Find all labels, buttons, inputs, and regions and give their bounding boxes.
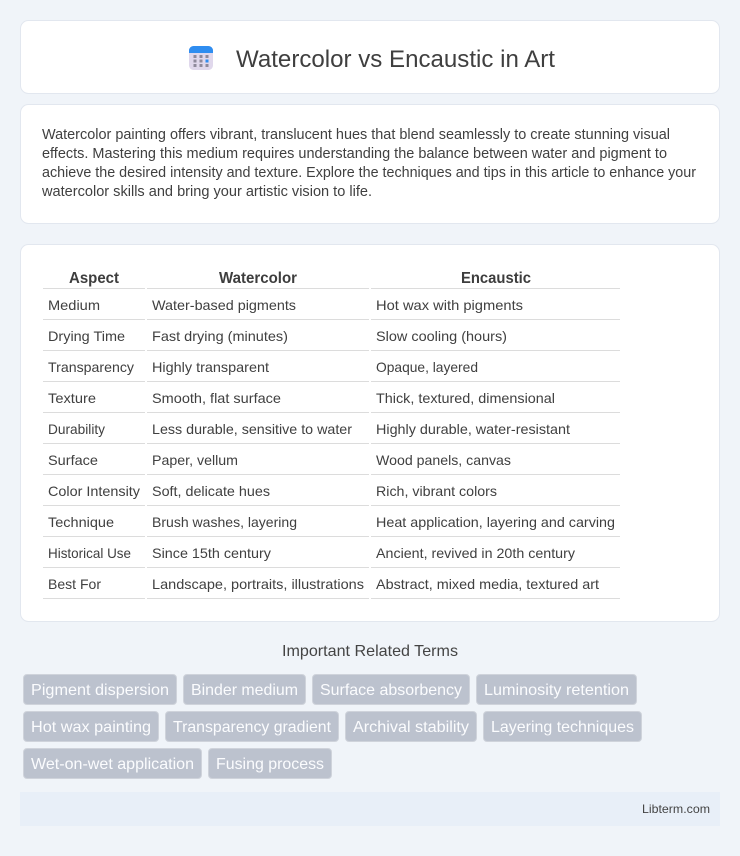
tag: Pigment dispersion: Pigment dispersion xyxy=(31,682,169,699)
row: Historical Use xyxy=(48,545,575,561)
related term tags xyxy=(24,674,642,778)
table header: Aspect xyxy=(69,270,120,287)
row: Color Intensity: Soft, delicate hues xyxy=(152,483,270,499)
intro text: achieve the desired intensity and texture. Explore the techniques and tips in this article to enhance your xyxy=(42,165,696,181)
row: Texture: Smooth, flat surface xyxy=(152,390,281,406)
row: Best For: Landscape, portraits, illustrations xyxy=(152,576,364,592)
row: Technique: Heat application, layering and carving xyxy=(376,514,615,530)
footer credit: Libterm.com xyxy=(642,802,710,816)
row: Drying Time: Fast drying (minutes) xyxy=(152,328,288,344)
tag: Surface absorbency xyxy=(312,674,470,704)
title: Watercolor vs Encaustic in Art xyxy=(236,46,555,73)
tag: Wet-on-wet application xyxy=(24,748,202,778)
row: Surface: Surface xyxy=(48,452,98,468)
table header: Watercolor xyxy=(219,270,297,287)
row: Texture xyxy=(48,390,555,406)
icon: calendar palette xyxy=(189,46,213,70)
tag: Luminosity retention: Luminosity retention xyxy=(484,682,629,699)
table header: Encaustic xyxy=(461,270,531,287)
row: Transparency: Highly transparent xyxy=(152,359,269,375)
tag: Transparency gradient: Transparency gradient xyxy=(173,719,332,736)
table header xyxy=(69,270,531,287)
row: Durability: Highly durable, water-resistant xyxy=(376,421,570,437)
tag: Pigment dispersion xyxy=(24,674,176,704)
tag: Layering techniques xyxy=(484,712,642,742)
row: Medium: Hot wax with pigments xyxy=(376,297,523,313)
tag: Luminosity retention xyxy=(476,674,636,704)
tag: Binder medium xyxy=(184,674,306,704)
tag: Layering techniques: Layering techniques xyxy=(491,719,634,736)
row: Best For: Abstract, mixed media, textured art xyxy=(376,576,599,592)
intro text: effects. Mastering this medium requires understanding the balance between water and pigment to xyxy=(42,146,667,162)
row: Historical Use: Historical Use xyxy=(48,545,131,561)
tag: Transparency gradient xyxy=(166,712,338,742)
row: Historical Use: Ancient, revived in 20th century xyxy=(376,545,575,561)
row: Best For xyxy=(48,576,599,592)
row: Durability xyxy=(48,421,570,437)
row: Medium: Water-based pigments xyxy=(152,297,296,313)
row: Transparency: Transparency xyxy=(48,359,134,375)
related terms heading: Important Related Terms xyxy=(282,643,458,660)
row: Technique: Brush washes, layering xyxy=(152,514,297,530)
row: Surface xyxy=(48,452,511,468)
panel: comparison table xyxy=(20,244,720,622)
row: Best For: Best For xyxy=(48,576,101,592)
row: Texture: Texture xyxy=(48,390,96,406)
row: Transparency: Opaque, layered xyxy=(376,359,478,375)
row: Technique xyxy=(48,514,615,530)
intro text: watercolor skills and bring your artistic vision to life. xyxy=(41,184,372,200)
tag: Wet-on-wet application: Wet-on-wet application xyxy=(31,756,194,773)
row: Color Intensity: Color Intensity xyxy=(48,483,140,499)
row: Surface: Wood panels, canvas xyxy=(376,452,511,468)
tag: Surface absorbency: Surface absorbency xyxy=(320,682,462,699)
intro text: Watercolor painting offers vibrant, translucent hues that blend seamlessly to create stunning visual xyxy=(42,127,670,143)
row: Texture: Thick, textured, dimensional xyxy=(376,390,555,406)
row: Medium: Medium xyxy=(48,297,100,313)
row: Drying Time: Drying Time xyxy=(48,328,125,344)
panel: introduction xyxy=(20,104,720,224)
row: Durability: Less durable, sensitive to water xyxy=(152,421,352,437)
tag: Hot wax painting xyxy=(24,712,158,742)
tag: Binder medium: Binder medium xyxy=(191,682,298,699)
row: Surface: Paper, vellum xyxy=(152,452,238,468)
row: Drying Time xyxy=(48,328,507,344)
row: Drying Time: Slow cooling (hours) xyxy=(376,328,507,344)
tag: Hot wax painting: Hot wax painting xyxy=(31,719,151,736)
row: Historical Use: Since 15th century xyxy=(152,545,271,561)
row: Durability: Durability xyxy=(48,421,105,437)
row: Color Intensity: Rich, vibrant colors xyxy=(376,483,497,499)
row: Color Intensity xyxy=(48,483,497,499)
tag: Archival stability: Archival stability xyxy=(353,719,469,736)
row: Medium xyxy=(48,297,523,313)
row: Transparency xyxy=(48,359,478,375)
intro text xyxy=(41,127,696,200)
footer xyxy=(20,792,720,826)
tag: Archival stability xyxy=(346,712,476,742)
tag: Fusing process xyxy=(208,748,332,778)
tag: Fusing process: Fusing process xyxy=(216,756,324,773)
header panel xyxy=(20,20,720,94)
row: Technique: Technique xyxy=(48,514,114,530)
